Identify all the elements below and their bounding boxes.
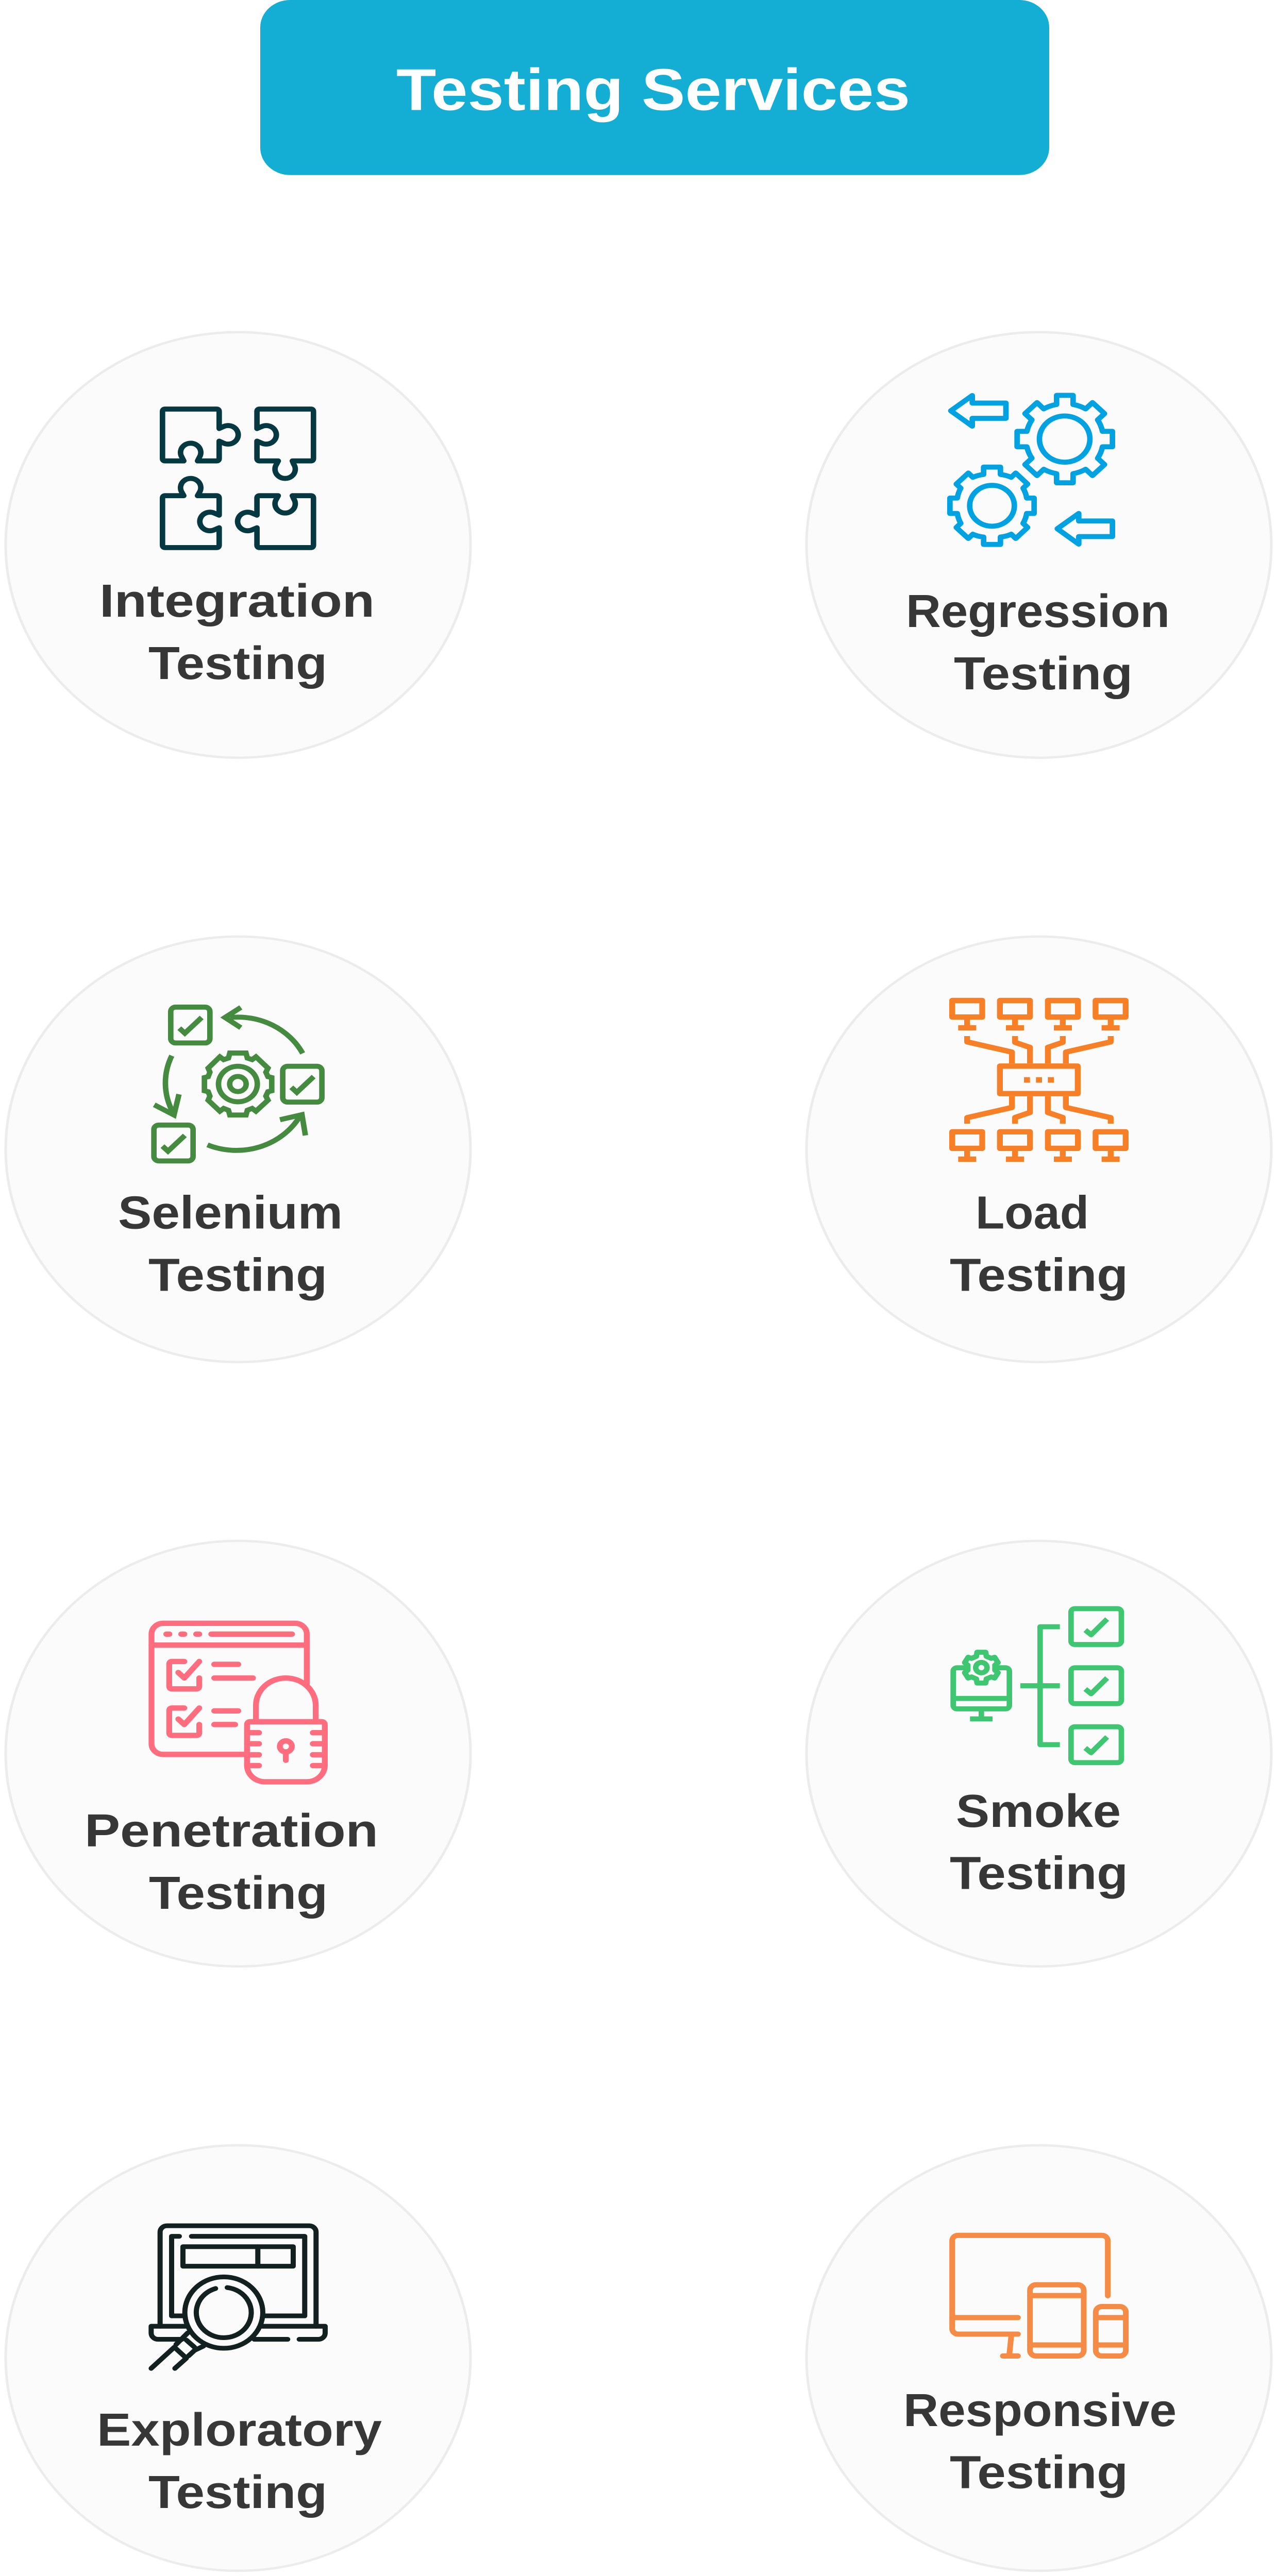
title banner xyxy=(260,0,1049,175)
panel: Selenium Testing xyxy=(6,937,471,1362)
icon: automation cycle with checkboxes xyxy=(154,1007,322,1161)
label: Selenium Testing: Selenium xyxy=(118,1187,343,1239)
label: Smoke Testing: Testing xyxy=(950,1847,1128,1899)
label: Responsive Testing xyxy=(903,2384,1177,2498)
label: Load Testing xyxy=(950,1187,1128,1301)
label: Integration Testing xyxy=(99,575,375,689)
label: Exploratory Testing: Testing xyxy=(148,2466,327,2518)
label: Selenium Testing: Testing xyxy=(148,1249,327,1301)
label: Load Testing: Testing xyxy=(950,1249,1128,1301)
label: Regression Testing: Testing xyxy=(954,648,1133,699)
panel: Regression Testing xyxy=(806,332,1271,758)
title banner: Testing Services xyxy=(396,57,910,123)
panel: Exploratory Testing xyxy=(6,2145,471,2571)
panel: Load Testing xyxy=(806,937,1271,1362)
label: Regression Testing: Regression xyxy=(906,585,1170,637)
icon: puzzle pieces xyxy=(162,409,313,548)
label: Penetration Testing: Penetration xyxy=(85,1805,378,1856)
icon: laptop with magnifier xyxy=(151,2226,325,2368)
icon: browser checklist with padlock xyxy=(152,1623,325,1782)
label: Responsive Testing: Testing xyxy=(950,2446,1128,2498)
label: Integration Testing: Testing xyxy=(148,637,327,689)
label: Integration Testing: Integration xyxy=(99,575,375,626)
label: Load Testing: Load xyxy=(976,1187,1089,1239)
icon: network of monitors xyxy=(952,1001,1125,1159)
label: Exploratory Testing xyxy=(97,2404,382,2518)
panel: Integration Testing xyxy=(6,332,471,758)
label: Penetration Testing xyxy=(85,1805,378,1919)
panel: Penetration Testing xyxy=(6,1541,471,1967)
label: Smoke Testing xyxy=(950,1785,1128,1899)
label: Penetration Testing: Testing xyxy=(149,1867,328,1919)
icon: desktop, tablet and phone xyxy=(952,2235,1126,2356)
panel: Smoke Testing xyxy=(806,1541,1271,1967)
label: Regression Testing xyxy=(906,585,1170,699)
label: Exploratory Testing: Exploratory xyxy=(97,2404,382,2455)
label: Responsive Testing: Responsive xyxy=(903,2384,1177,2436)
panel: Responsive Testing xyxy=(806,2145,1271,2571)
icon: monitor with gear and check list xyxy=(953,1608,1121,1762)
label: Selenium Testing xyxy=(118,1187,343,1301)
icon: gears and arrows xyxy=(950,395,1113,545)
label: Smoke Testing: Smoke xyxy=(956,1785,1121,1837)
